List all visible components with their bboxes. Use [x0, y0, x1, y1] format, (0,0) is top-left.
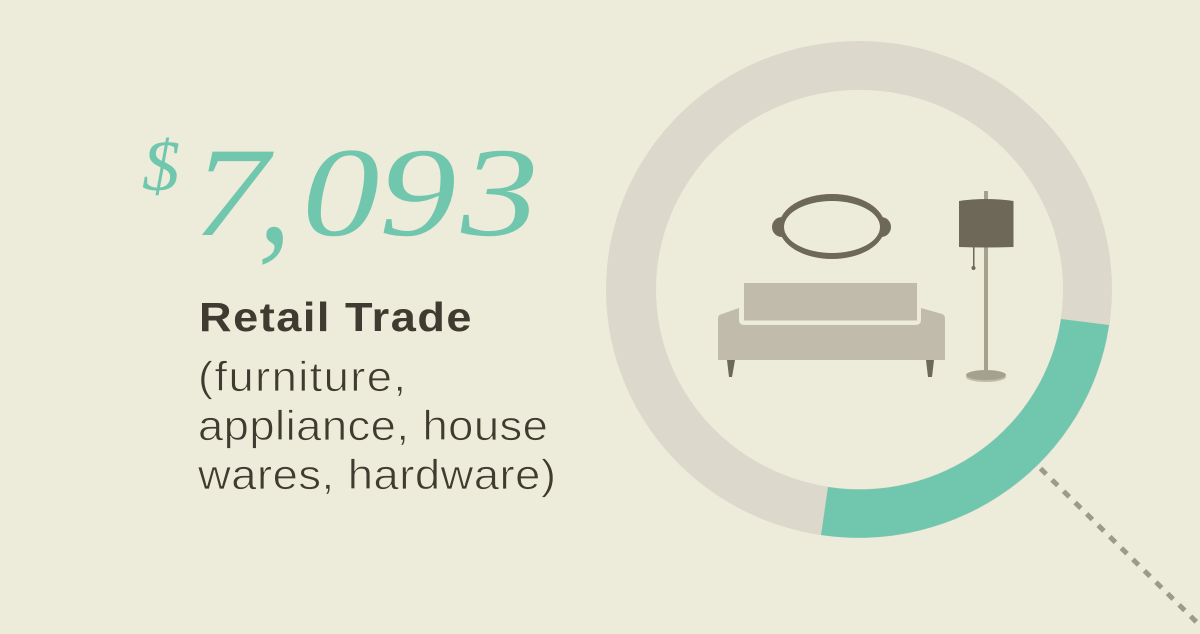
dollar amount: ,	[258, 112, 291, 275]
description text: wares, hardware)	[197, 452, 556, 499]
description text: appliance, house	[198, 403, 548, 450]
dollar amount: 3	[460, 122, 538, 263]
dollar amount: 7	[193, 122, 274, 263]
dollar amount	[142, 112, 538, 275]
teal segment	[821, 319, 1109, 538]
dollar amount: 0	[302, 122, 379, 263]
description text	[197, 354, 556, 499]
dotted leader line	[1040, 468, 1198, 624]
donut chart	[606, 41, 1112, 538]
icon: floor lamp	[959, 191, 1014, 382]
heading: Retail Trade: Retail Trade	[199, 295, 473, 341]
dollar amount: 9	[379, 122, 456, 263]
dollar amount: $	[142, 126, 180, 206]
icon: sofa	[718, 283, 945, 377]
icon: mirror	[772, 194, 891, 259]
description text: (furniture,	[198, 354, 406, 401]
